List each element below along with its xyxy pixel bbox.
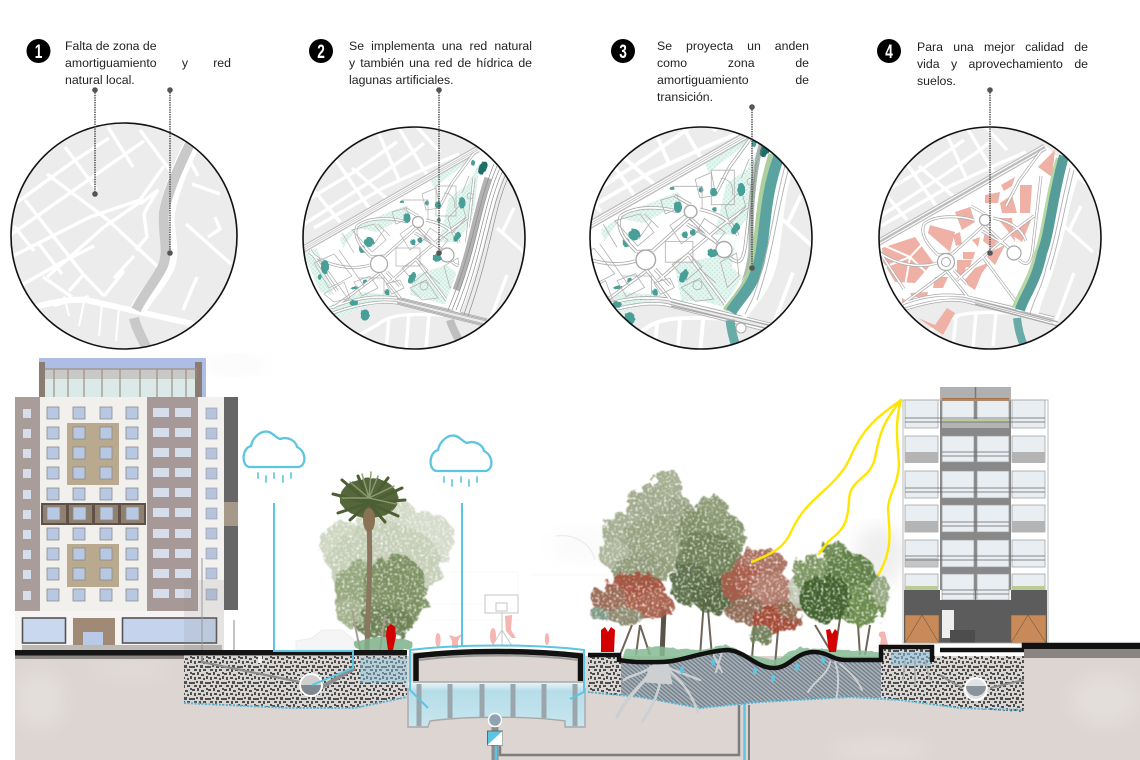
shrub base <box>354 637 414 653</box>
surface slab left <box>15 503 407 685</box>
balcony rails <box>905 418 1045 594</box>
ground texture <box>15 355 1140 760</box>
step 3 text: Se proyecta un anden <box>657 39 809 53</box>
basketball hoop <box>485 595 518 646</box>
tank outlet valve <box>488 714 502 760</box>
map circle 2: red natural y lagunas <box>289 123 529 350</box>
pink building blocks <box>882 150 1055 335</box>
number badge 3 <box>611 39 635 63</box>
map circle 1: falta de zona de amortiguamiento <box>9 123 237 351</box>
drainage pipe right <box>940 675 1024 701</box>
number badge 3: 3 <box>619 41 627 63</box>
yellow energy lines <box>752 400 901 574</box>
rain icon left <box>244 432 304 482</box>
step 1 text: natural local. <box>65 73 135 87</box>
step 2 text: y también una red de hídrica de <box>349 56 532 70</box>
map circle 4: mejor calidad de vida <box>878 126 1102 350</box>
left building <box>15 358 238 651</box>
step 4 text: vida y aprovechamiento de <box>917 57 1088 71</box>
garage doors <box>905 615 1046 643</box>
step 2 text: Se implementa una red natural <box>349 39 532 53</box>
rain icon right <box>431 436 491 486</box>
tree trunks group <box>620 600 870 665</box>
soil bed right <box>588 648 1024 712</box>
number badge 2 <box>309 39 333 63</box>
step 1 text: amortiguamiento y red <box>65 56 231 70</box>
green canopy <box>788 541 889 625</box>
step 4 text: Para una mejor calidad de <box>917 40 1088 54</box>
step 4 text: suelos. <box>917 74 956 88</box>
gravel bed left <box>184 656 407 708</box>
faint background scenery <box>296 525 950 650</box>
red figure <box>386 624 396 650</box>
tree and palm <box>321 472 454 653</box>
building ground floor <box>15 558 234 651</box>
map circle 3: anden como zona de amortiguamiento <box>589 126 813 350</box>
pin leaders <box>92 87 993 271</box>
step 2 text <box>349 39 532 87</box>
right building <box>903 387 1048 643</box>
step 1 text: Falta de zona de <box>65 39 157 53</box>
brick base <box>904 590 1047 643</box>
step 1 text <box>65 39 231 87</box>
step 3 text: transición. <box>657 90 713 104</box>
tank roof <box>416 652 580 681</box>
red canopies <box>590 547 802 645</box>
number badge 4 <box>877 39 901 63</box>
surface slab right <box>588 645 1140 668</box>
step 3 text: amortiguamiento de <box>657 73 809 87</box>
building windows <box>47 407 139 601</box>
step 4 text <box>917 40 1088 88</box>
tree trunks <box>367 525 370 650</box>
building roof block <box>39 358 206 397</box>
infiltration drops <box>680 656 825 682</box>
number badge 1 <box>26 39 50 63</box>
step 3 text <box>657 39 809 104</box>
number badge 2: 2 <box>317 41 325 63</box>
grass strip <box>622 645 880 668</box>
facade glazing <box>905 400 1045 600</box>
tree roots <box>617 652 930 722</box>
palm crown <box>333 472 405 532</box>
playing figures <box>435 615 549 648</box>
olive canopies <box>599 468 745 613</box>
number badge 4: 4 <box>885 41 893 63</box>
drainage pipe left <box>299 673 323 697</box>
water tank <box>408 646 585 760</box>
tree group right <box>590 468 889 668</box>
underground outflow pipe <box>500 667 749 760</box>
tree foliage <box>321 496 454 638</box>
step 3 text: como zona de <box>657 56 809 70</box>
red figures <box>601 627 838 652</box>
number badge 1: 1 <box>35 41 42 63</box>
building body <box>15 397 40 611</box>
step 2 text: lagunas artificiales. <box>349 73 454 87</box>
